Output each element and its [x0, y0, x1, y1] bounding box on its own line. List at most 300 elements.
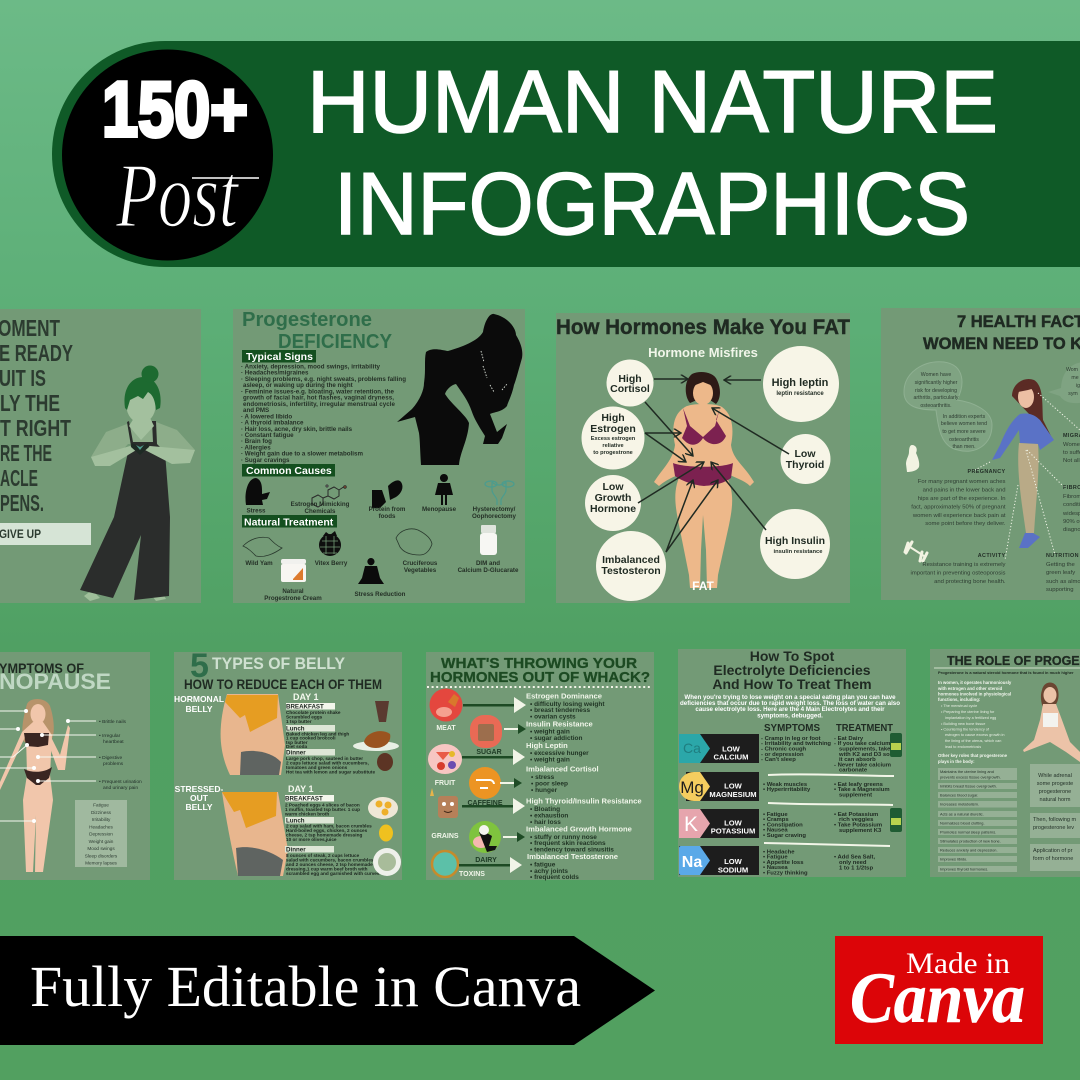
callout: arthritis: than men. [952, 444, 976, 450]
meal plan: day 1 bottom: 8 ounces of steak, 2 cups lettuce [286, 853, 360, 858]
cause labels: Hysterectomy/ [473, 506, 516, 513]
heading: HOW TO REDUCE EACH OF THEM [184, 677, 382, 692]
row: low potassium: rich veggies [839, 817, 874, 823]
meal plan: day 1 top: DAY 1 [293, 692, 319, 702]
text: pregnancy [911, 469, 1006, 527]
text: activity: Resistance training is extremely [922, 562, 1006, 568]
intro text: cause electrolyte loss. Here are the 4 Main Electrolytes and their [695, 706, 885, 713]
cause labels: Menopause [422, 506, 457, 513]
figure: woman with heart hands [80, 366, 195, 601]
callout: arthritis: Women have [921, 372, 951, 378]
right info boxes: Then, following m [1033, 817, 1077, 823]
icon: supplement bottles [890, 733, 902, 832]
poster quote [0, 315, 73, 516]
text: functions: hormones involved in physiological [938, 692, 1011, 696]
hormone circles [582, 346, 839, 601]
meal plan: day 1 top: tsp butter [286, 740, 308, 745]
arrows [459, 697, 526, 873]
text: activity [911, 553, 1006, 585]
row: low calcium: - Never take calcium [834, 762, 891, 768]
footer arrow: fully editable in canva: Fully Editable in Canva [30, 954, 581, 1019]
circle labels: High [601, 412, 625, 424]
intro text: When you're trying to lose weight on a special eating plan you can have [684, 694, 896, 701]
circle labels: Testosteron [601, 565, 661, 577]
circle labels: Imbalanced [602, 554, 660, 566]
hormone effects list [526, 692, 642, 881]
row: low calcium: - Cramp in leg or foot [761, 736, 821, 742]
callout: heart health: Wom [1066, 367, 1078, 373]
treatment labels: Cruciferous [403, 560, 438, 567]
text: pregnancy: PREGNANCY [967, 469, 1006, 475]
circle labels: Low [602, 481, 624, 493]
symptom labels: and urinary pain [103, 785, 138, 791]
row: low calcium: supplements, take [839, 746, 891, 752]
icon: fruit [428, 744, 462, 774]
circle labels: to progestrone [593, 450, 633, 456]
roles list: Improves libido. [940, 856, 967, 862]
row: low calcium: - or depression [761, 752, 804, 758]
circle labels: Cortisol [610, 383, 650, 395]
text: functions: lead to endometriosis [945, 745, 981, 749]
cause labels: foods [379, 513, 396, 520]
roles list: Increases metabolism. [940, 802, 979, 806]
callout: heart health: me [1071, 375, 1079, 381]
photo: seated woman [1023, 682, 1080, 762]
heading [430, 655, 650, 686]
callout: arthritis: arthritis, particularly [914, 395, 959, 401]
circle labels: Excess estrogen [591, 436, 636, 442]
text: activity: important in preventing osteoporosis [911, 570, 1006, 576]
poster quote: LY THE [0, 390, 60, 416]
hormone effects list: • frequent colds [530, 874, 579, 881]
treatment labels: Stress Reduction [355, 591, 406, 598]
right info boxes: form of hormone [1033, 856, 1073, 862]
text: pregnancy: hips are part of the experience. In [918, 496, 1006, 502]
treatment labels: Progestrone Cream [264, 595, 322, 602]
row: low calcium: Ca [683, 740, 701, 756]
meal plan: day 1 top: 2 cups lettuce salad with cucumbers, [286, 760, 369, 766]
give up button [0, 523, 91, 545]
heading: Progesterone [242, 308, 372, 331]
subheading: Hormone Misfires [648, 345, 758, 360]
column headers: TREATMENT [836, 723, 893, 734]
row: low calcium: with K2 and D3 so [838, 752, 890, 758]
row: low potassium: • Eat Potassium [834, 812, 878, 818]
row: low sodium: 1 to 1 1/2tsp [839, 866, 873, 872]
callout: arthritis: risk for developing [915, 388, 957, 394]
circle labels: Low [794, 448, 816, 460]
symptom labels: • Digestive [99, 755, 122, 761]
cause labels: Stress [247, 508, 266, 514]
text: nutrition: green leafy [1046, 570, 1075, 576]
badge: 150+ Post [62, 50, 273, 260]
photo: stressed belly [222, 792, 288, 876]
photo: hormonal belly [221, 694, 285, 775]
typical signs list: · A thyroid imbalance [241, 420, 304, 426]
poster quote: OMENT [0, 315, 60, 341]
heading: INFOGRAPHICS [334, 154, 970, 253]
give up button: GIVE UP [0, 529, 41, 541]
meal plan: day 1 top: Baked chicken leg and thigh [286, 732, 349, 736]
typical signs list: · Anxiety, depression, mood swings, irritability [241, 364, 381, 370]
callout: arthritis: osteoarthritis. [920, 403, 952, 409]
symptom labels [99, 719, 142, 791]
food labels: GRAINS [431, 833, 459, 840]
meal plan: day 1 top: Large pork chop, sauteed in butter [286, 756, 363, 761]
panel: role of progesterone [930, 649, 1080, 877]
typical signs list: · Feminine issues-e.g. bloating, water retention, the [241, 388, 395, 395]
meal plan: day 1 bottom: cheese, 2 tsp homemade dressing [286, 832, 362, 838]
meal plan: day 1 bottom: 10 or more olives,juice [286, 837, 337, 842]
heading: HUMAN NATURE [307, 52, 998, 151]
row: low magnesium: supplement [839, 792, 872, 798]
callout: arthritis: In addition experts [943, 414, 986, 420]
typical signs list: · Sleeping problems, e.g. night sweats, problems falling [241, 376, 406, 383]
poster quote: E READY [0, 340, 73, 366]
heading: DEFICIENCY [278, 331, 393, 353]
row: low potassium: • Nausea [763, 828, 788, 834]
roles list: Acts as a natural diuretic. [940, 812, 984, 816]
text: functions: the lining of the uterus, which can [945, 739, 1001, 743]
typical signs list [241, 350, 406, 464]
meal plan: day 1 bottom: Dinner [286, 846, 306, 854]
icon: meditation [358, 558, 384, 584]
meal plan: day 1 top: Chocolate protein shake [286, 710, 341, 715]
row: low magnesium: • Hyperirritability [763, 787, 811, 793]
treatment labels: Natural [282, 588, 304, 595]
symptom labels: problems [103, 761, 124, 767]
row: low sodium: • Fatigue [763, 854, 788, 860]
text: migraines [1063, 433, 1080, 464]
icon: menopause figure [435, 474, 453, 505]
row: low sodium: • Add Sea Salt, [834, 854, 875, 860]
treatment labels [245, 560, 519, 602]
symptom labels: heartbeat [103, 739, 124, 745]
callout: heart health [1048, 362, 1080, 403]
row: low potassium: K [684, 813, 698, 836]
meal plan: day 1 top: 1 tsp butter [286, 719, 312, 724]
hormone effects list: • ovarian cysts [530, 714, 576, 720]
hormone effects list: • weight gain [530, 756, 570, 764]
meal plan: day 1 bottom: Hard-boiled eggs, chicken, 2 ounces [286, 828, 368, 833]
poster quote: UIT IS [0, 365, 46, 391]
meal plan: day 1 bottom [284, 784, 380, 876]
row: low potassium: • Constipation [763, 822, 803, 828]
food labels: CAFFEINE [468, 800, 503, 807]
other symptoms box: Sleep disorders [85, 853, 118, 858]
right info boxes: Application of pr [1033, 848, 1073, 854]
typical signs list: · Sugar cravings [241, 457, 290, 464]
text: functions: Other key roles that progesterone [938, 753, 1008, 758]
heading: WHAT'S THROWING YOUR [441, 655, 637, 672]
typical signs list: · Allergies [241, 444, 271, 451]
hormone effects list: • weight gain [530, 728, 570, 736]
treatment labels: Wild Yam [245, 560, 273, 567]
circle labels: Hormone [590, 503, 636, 515]
meal plan: day 1 top: 1 cup cooked broccoli [286, 736, 336, 740]
food labels: TOXINS [459, 871, 485, 878]
other symptoms box: Fatigue [93, 802, 109, 808]
meal plan: day 1 bottom: 2 Poached eggs 4 slices of bacon [285, 802, 360, 808]
typical signs list: and PMS [243, 407, 269, 414]
other symptoms box [75, 800, 127, 867]
row: low potassium: supplement K3 [839, 828, 882, 834]
text: nutrition [1046, 553, 1080, 593]
panel: how hormones make you fat [556, 313, 850, 603]
row: low potassium: POTASSIUM [711, 826, 755, 836]
treatment labels: Vitex Berry [315, 560, 348, 567]
heading: YMPTOMS OF [0, 660, 84, 676]
row: low magnesium: • Take a Magnesium [834, 787, 890, 793]
text: functions [937, 680, 1012, 764]
icon: stress [245, 478, 270, 505]
typical signs list: asleep, or waking up during the night [243, 382, 353, 389]
circle labels: reliative [602, 443, 624, 449]
roles list: Reduces anxiety and depression. [940, 848, 998, 852]
cause labels: Estrogen Mimicking [291, 501, 350, 508]
footer arrow: fully editable in canva [0, 936, 655, 1045]
row: low potassium: • Sugar craving [763, 833, 806, 839]
row: low potassium: • Take Potassium [834, 822, 882, 828]
hormone effects list: • hunger [531, 787, 558, 794]
heading [712, 648, 872, 692]
text: functions: with estrogen and other steroid [937, 686, 1003, 691]
belly labels: HORMONAL [174, 694, 224, 704]
row: low sodium: only need [839, 860, 867, 866]
hormone effects list: • fatigue [530, 862, 556, 868]
meal plan: day 1 bottom: scrambled egg and garnished with curves [286, 871, 380, 876]
icon: dairy [469, 821, 501, 853]
heading: TYPES OF BELLY [212, 654, 346, 673]
cause labels: Protein from [369, 506, 406, 513]
right info boxes: progesterone lev [1033, 825, 1074, 831]
row: low potassium: • Fatigue [763, 812, 788, 818]
hormone effects list: • exhaustion [530, 812, 568, 820]
typical signs list: · Weight gain due to a slower metabolism [241, 451, 363, 458]
text: nutrition: Getting the [1046, 562, 1076, 568]
panel: perfect moment poster [0, 309, 201, 603]
meal plan: day 1 top: Scrambled eggs [286, 714, 323, 720]
natural treatment [242, 515, 519, 602]
icon: sugar [470, 715, 502, 748]
symptom labels: • Frequent urination [99, 779, 142, 785]
icon: dumbbell [905, 542, 927, 561]
icon: progesterone cream jar [281, 559, 306, 582]
meal plan: day 1 bottom: BREAKFAST [285, 796, 323, 802]
panel: progesterone deficiency [233, 308, 525, 603]
text: functions: implantation by a fertilized egg [945, 716, 996, 720]
symptom labels: • Irregular [99, 733, 121, 739]
meal plan: day 1 top: BREAKFAST [286, 704, 324, 710]
circle labels: insulin resistance [774, 549, 823, 555]
hormone effects list: Insulin Resistance [526, 720, 593, 728]
hormone effects list: Estrogen Dominance [526, 692, 602, 700]
row: low magnesium: • Eat leafy greens [834, 782, 884, 788]
typical signs list: · Hair loss, acne, dry skin, brittle nails [241, 426, 353, 433]
heading: 5 [190, 647, 209, 685]
icon: caffeine [469, 767, 501, 799]
hormone effects list: • poor sleep [531, 780, 568, 788]
other symptoms box: Weight gain [89, 839, 114, 844]
row: low sodium [679, 846, 875, 876]
roles list: Balances blood sugar. [940, 792, 978, 798]
heading: NOPAUSE [0, 669, 111, 694]
row: low magnesium: Mg [680, 778, 704, 797]
cause labels [247, 501, 517, 520]
treatment labels: Vegetables [404, 567, 437, 574]
row: low sodium: • Headache [763, 850, 795, 856]
circle labels: Thyroid [786, 459, 824, 471]
meal plan: day 1 top: Diet soda [286, 744, 307, 749]
badge: 150+ Post: Post [115, 144, 240, 246]
row: low magnesium: • Weak muscles [763, 782, 808, 788]
belly labels: BELLY [185, 802, 213, 812]
heading [184, 647, 382, 692]
meal plan: day 1 top: Lunch [286, 726, 305, 732]
icon: pregnancy [906, 445, 919, 472]
belly labels [174, 694, 224, 812]
heading: How To Spot [750, 648, 835, 664]
silhouette [397, 314, 522, 465]
circle labels: High [618, 373, 642, 385]
text: functions: estrogen to cause excess growth in [945, 733, 1005, 737]
heading: Electrolyte Deficiencies [713, 662, 871, 678]
heading: And How To Treat Them [712, 676, 872, 692]
hormone effects list: • hair loss [530, 819, 561, 826]
text: pregnancy: fact, approximately 50% of pregnant [911, 504, 1006, 510]
text: pregnancy: and pains in the lower back and [923, 488, 1006, 494]
other symptoms box: Memory lapses [85, 860, 118, 866]
common causes: Common Causes [246, 465, 332, 477]
roles list: Promotes normal sleep patterns. [940, 830, 996, 834]
row: low sodium: • Appetite loss [763, 860, 804, 866]
other symptoms box: Mood swings [87, 846, 115, 851]
callout: arthritis [904, 362, 992, 451]
roles list [938, 768, 1017, 872]
panel: what's throwing your hormones [426, 652, 654, 881]
roles list: Inhibits breast tissue overgrowth. [940, 784, 997, 788]
row: low calcium: - Chronic cough [761, 746, 807, 752]
row: low sodium: LOW [724, 857, 743, 866]
right info boxes [1030, 764, 1080, 871]
roles list: prevents excess tissue overgrowth. [940, 774, 1001, 780]
text: activity: ACTIVITY [978, 553, 1006, 559]
intro text: symptoms, debugged. [757, 712, 823, 720]
meal plan: day 1 bottom: and 2 ounces cheese, 2 tsp homemade [286, 862, 373, 867]
icon: uterus [485, 481, 514, 505]
typical signs list: · Brain fog [241, 438, 272, 445]
text: pregnancy: women will experience back pain at [912, 513, 1006, 519]
icon: vitex berry [319, 531, 341, 556]
hormone effects list: High Leptin [526, 741, 568, 750]
fat label: FAT [692, 579, 715, 593]
typical signs list: growth of facial hair, hot flashes, vaginal dryness, [243, 395, 394, 402]
roles list: Normalizes blood clotting. [940, 820, 985, 826]
belly labels: STRESSED- [175, 784, 223, 794]
row: low potassium [679, 809, 882, 839]
meal plan: day 1 bottom: Lunch [286, 818, 305, 824]
hormone effects list: • sugar addiction [530, 735, 583, 742]
badge: made in canva [835, 936, 1043, 1044]
callout: heart health: sym [1068, 391, 1078, 397]
heading [922, 315, 1080, 350]
meal plan: day 1 bottom: dressing,1 cup warm beef broth with [286, 866, 368, 872]
symptom labels: • Brittle nails [99, 719, 127, 725]
heading [307, 52, 998, 253]
treatment labels: DIM and [476, 560, 500, 567]
callout: arthritis: to get more severe [942, 429, 986, 435]
poster quote: RE THE [0, 440, 52, 466]
panel: electrolyte deficiencies [678, 648, 906, 877]
figure: body [654, 372, 754, 588]
panel: role of progesterone: Progesterone is a natural steroid hormone that is found in much higher [938, 670, 1074, 675]
figure: woman in bikini [0, 699, 70, 872]
row: low sodium: • Fuzzy thinking [763, 870, 808, 876]
right info boxes: progesterone [1039, 789, 1071, 795]
meal plan: day 1 bottom: 1 muffin, toasted tsp butter. 1 cup [285, 807, 360, 812]
poster quote: ACLE [0, 465, 38, 491]
intro text [680, 694, 900, 720]
column headers: SYMPTOMS [764, 723, 820, 734]
roles list: Maintains the uterine lining and [940, 769, 994, 774]
heading: HORMONES OUT OF WHACK? [430, 669, 650, 686]
typical signs list: · Headaches/migraines [241, 370, 309, 377]
other symptoms box: Depression [89, 832, 113, 836]
heading: How Hormones Make You FAT [556, 316, 850, 339]
food labels: SUGAR [476, 749, 502, 756]
other symptoms box: Irritability [92, 817, 111, 822]
hormone effects list: • achy joints [530, 868, 568, 875]
icon: protein [372, 480, 402, 508]
hormone effects list: • stuffy or runny nose [530, 834, 597, 841]
panel: symptoms of menopause [0, 652, 150, 880]
hormone effects list: • excessive hunger [530, 750, 589, 757]
row: low calcium: it can absorb [839, 757, 876, 763]
food labels: DAIRY [475, 857, 497, 864]
intro text: deficiencies that occur due to rapid weight loss. The loss of water can also [680, 700, 900, 707]
icon: meat [430, 688, 462, 722]
text: pregnancy: For many pregnant women aches [918, 479, 1006, 485]
food photos [353, 701, 401, 876]
right info boxes: some progeste [1037, 781, 1073, 787]
text: functions: • Preparing the uterine lining for [941, 710, 995, 714]
row: low calcium: - Can't sleep [761, 757, 796, 763]
text: fibromyalgia [1062, 485, 1080, 533]
typical signs list: · A lowered libido [241, 413, 292, 420]
row: low calcium: - Irritability and twitching [761, 741, 831, 747]
right info boxes: While adrenal [1038, 773, 1072, 779]
row: low magnesium: MAGNESIUM [709, 790, 757, 799]
symptom pointers [0, 709, 96, 823]
text: functions: • Countering the tendency of [941, 728, 990, 732]
cause labels: Chemicals [305, 508, 336, 515]
row: low magnesium [679, 772, 890, 801]
roles list: Stimulates production of new bone. [940, 838, 1001, 844]
callout: heart health: ig [1076, 383, 1080, 389]
meal plan: day 1 top: Hot tea with lemon and sugar substitute [286, 770, 375, 774]
circle labels: High leptin [772, 377, 829, 389]
meal plan: day 1 bottom: warm chicken broth [284, 812, 329, 816]
circle labels: High Insulin [765, 535, 825, 547]
typical signs list: endometriosis, infertility, irregular menstrual cycle [243, 401, 396, 408]
hormone effects list: • difficulty losing weight [530, 701, 605, 708]
callout: arthritis: believe women tend [941, 421, 987, 427]
panel: 5 types of belly [174, 647, 402, 880]
column headers [764, 723, 893, 734]
text: nutrition: supporting [1046, 587, 1074, 593]
row: low potassium: • Cramps [763, 817, 789, 823]
poster quote: T RIGHT [0, 415, 71, 441]
